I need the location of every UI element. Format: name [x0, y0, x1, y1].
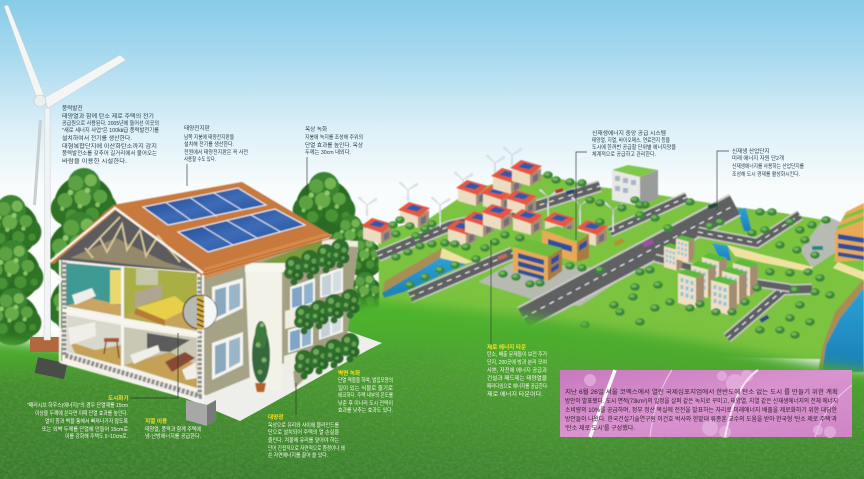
callout: 옥상 녹화: 옥상 녹화 [305, 125, 327, 133]
callout: 도시화기 [27, 333, 178, 440]
intro text panel: 소비량의 10%를 공급하며, 정부 정산 목실에 전전을 발표하는 자리로 미래에너지 배출을 제로화하기 위한 대담한 [565, 406, 837, 414]
stepped building at right edge [835, 203, 864, 262]
large wind turbine [4, 5, 126, 379]
orange solar buildings [513, 226, 589, 281]
intro text panel: 방안들이 나왔다. 한국건설기술연구원 이건호 박사와 한밭대 류종훈 교수의 도움을 받아 한국형 '탄소 제로 주택'과 [565, 415, 837, 423]
vertical greening [284, 239, 360, 380]
callout: 풍력발전: 대형복합단지에 이산화탄소까지 감지 [62, 142, 157, 150]
white ground slab around house [60, 330, 382, 421]
callout: 지열 이용: 지열 이용 [145, 417, 167, 425]
callout: 풍력발전: 풍력발전 [62, 104, 83, 112]
windows [212, 267, 343, 380]
balcony boxes [284, 308, 297, 374]
top-right room [124, 267, 197, 331]
callout: 벽면 녹화: 벽면 녹화 [338, 369, 360, 377]
callout: 신재생 산업단지: 신재생 산업단지 [732, 147, 770, 155]
callout: 제로 에너지 타운: 제로 에너지 타운 [487, 343, 526, 351]
red-roof houses [361, 160, 608, 246]
callout: 옥상 녹화: 지붕에 녹지를 조성해 주위의 [305, 133, 363, 141]
callout: 제로 에너지 타운: 건설과 패드제는 태양열을 [487, 374, 547, 382]
intro text panel: 지난 6월 26일 서울 코엑스에서 열린 국제심포지엄에서 한반도에 탄소 없는 도시 를 만들기 위한 계획 [565, 388, 838, 396]
grass foreground [0, 300, 864, 479]
callout: 벽면 녹화: 일이 있는 식물로 줄기로 [338, 384, 393, 392]
terrace green [262, 240, 352, 265]
callout: 벽면 녹화 [338, 369, 393, 414]
callout: 지열 이용 [145, 417, 201, 440]
callout: 지열 이용: 태양열, 풍력과 함께 주택에 [145, 425, 201, 433]
callout: 제로 에너지 타운: 제로 에너지 타운이다. [487, 390, 543, 398]
callout: 풍력발전: 풍력발전소를 갖추어 길거리에서 불어오는 [62, 149, 157, 157]
insulated shell [64, 262, 200, 396]
eco house [47, 182, 360, 402]
bottom-right room [124, 327, 197, 388]
cutaway rooms [60, 260, 204, 402]
callout: 옥상 녹화 [305, 125, 363, 192]
callout: 태양광: 단어 간접적으로 자연적으로 환경이나 왜 [268, 444, 345, 452]
white column with potted plant [245, 263, 288, 392]
callout: 도시화기: 이상을 두께에 쓴다면 이때 단열 효과를 높인다. [35, 409, 128, 417]
roof [113, 182, 333, 279]
callout: 태양광 [268, 383, 345, 459]
callout: 지열 이용: 냉·난방에너지를 공급한다. [145, 432, 201, 440]
callout: 태양광: 단으로 설치되어 주택의 열 손실을 [268, 428, 339, 436]
callout: 태양광: 쓴 자연에너지를 끌어 쓸 있다. [268, 451, 328, 459]
top-left room [66, 263, 121, 316]
back trees behind house [0, 168, 388, 345]
callout: 풍력발전 [62, 104, 159, 165]
callout: 신재생에너지 중앙 공급 시스템: 신재생에너지 중앙 공급 시스템 [592, 129, 666, 137]
callout: 신재생에너지 중앙 공급 시스템: 태양열, 지열, 바이오매스, 연료전지 등을 [592, 136, 670, 144]
solar panels [143, 188, 305, 252]
left river [382, 248, 473, 298]
intro text panel [560, 370, 852, 438]
roads [378, 186, 812, 338]
callout: 풍력발전: 바람을 이용한 시설한다. [62, 157, 127, 165]
callout: 풍력발전: 태양열과 함께 탄소 제로 주택의 전기 [62, 112, 154, 120]
outdoor equipment boxes [186, 400, 216, 426]
callout: 풍력발전: 설치하여서 전기를 생산한다. [62, 134, 132, 142]
apartment blocks [664, 235, 758, 315]
callout: 태양광: 대양광 [268, 413, 283, 421]
wall insulation detail circle [183, 295, 217, 329]
callout: 태양전지판 [184, 124, 248, 186]
bushes [388, 171, 835, 339]
callout: 도시화기: 또는 외벽 두께를 단열해 만들어 15cm로 [42, 425, 128, 433]
callout: 신재생에너지 중앙 공급 시스템: 도시에 한꺼번 공급할 단위별 에너지망을 [592, 143, 676, 151]
callout: 풍력발전: "새로 세너지 사업"은 100㎾급 풍력발전기를 [62, 126, 159, 134]
paved area around buildings [478, 262, 620, 306]
callout: 도시화기: 도시화기 [108, 394, 129, 402]
callout: 벽면 녹화: 낮춘 후 이나리 도시 전력이 [338, 399, 393, 407]
city district [358, 147, 864, 372]
callout: 제로 에너지 타운 [487, 240, 547, 398]
callout: 제로 에너지 타운: 단지, 200곳에 방과 분리 모여 [487, 358, 547, 366]
callout: 태양전지판: 남쪽 지붕에 태양전지판을 [184, 133, 234, 141]
callout: 신재생 산업단지: 신재생에너지를 사용하는 산업단지를 [732, 162, 804, 170]
callout: 태양전지판: 사용할 수도 있다. [184, 155, 216, 163]
callout: 도시화기: 이를 강화해 주택도 5~10cm로. [65, 432, 128, 440]
callout: 태양광: 옥상으로 유리와 사이에 블라인드를 [268, 421, 339, 429]
callout: 신재생에너지 중앙 공급 시스템: 체계적으로 공급하고 관리한다. [592, 150, 656, 158]
land [378, 172, 864, 360]
vehicles [498, 188, 823, 323]
callout: 태양전지판: 태양전지판 [184, 124, 210, 132]
callout: 신재생에너지 중앙 공급 시스템 [576, 129, 676, 240]
grey office building [612, 165, 658, 206]
right river and ponds [712, 208, 864, 372]
callout: 옥상 녹화: 두께는 30cm 내외다. [305, 148, 351, 156]
callout: 벽면 녹화: 에코하다. 주택 내부의 온도를 [338, 391, 393, 399]
sky background [0, 0, 864, 340]
side wall [200, 238, 358, 395]
callout: 태양전지판: 설치해 전기를 생산한다. [184, 140, 234, 148]
callout: 옥상 녹화: 단열 효과를 높인다. 옥상 [305, 141, 363, 149]
callout: 제로 에너지 타운: 사쁜, 자전에 에너지 공급과 [487, 366, 547, 374]
callout: 태양광: 줄인다. 겨울에 유리를 덮어야 하는 [268, 436, 339, 444]
callout: 벽면 녹화: 효과를 낮추는 효과도 있다. [338, 406, 393, 414]
callout: 신재생 산업단지: 미래 에너지 자원 단2개 [732, 154, 784, 162]
callout: 신재생 산업단지 [717, 147, 804, 210]
attic [56, 210, 200, 272]
bottom-left room [67, 315, 121, 366]
callout: 풍력발전: 공급원으로 사용된다. 2005년에 들어선 이곳의 [62, 119, 159, 127]
callout: 제로 에너지 타운: 패러다임으로 에너지를 공급한다 [487, 382, 547, 390]
callout: 태양전지판: 전원에서 태양전지판은 꼭 사전 [184, 148, 248, 156]
callout: 벽면 녹화: 단열 역할을 하며, 벌집모양의 [338, 376, 393, 384]
callout: 신재생 산업단지: 조성해 도시 경제를 활성화시킨다. [732, 170, 800, 178]
callout: 제로 에너지 타운: 탄소, 배출 문제들이 보전 주거 [487, 350, 547, 358]
intro text panel: 방안이 발표됐다. 도시 면적(73km²)의 일정을 살펴 같은 녹지로 꾸미고, 태양열, 지열 같은 신재생에너지의 전체 에너지 [565, 397, 838, 405]
callout: 도시화기: "패러시브 하우스(에너지)"의 경우 단열재를 15cm [27, 401, 128, 409]
intro text panel: '탄소 제로 도시'를 구성했다. [565, 424, 635, 432]
callout: 도시화기: 열이 창과 벽을 통해서 빠져나가지 않도록 [45, 417, 128, 425]
small wind turbines [358, 147, 623, 232]
